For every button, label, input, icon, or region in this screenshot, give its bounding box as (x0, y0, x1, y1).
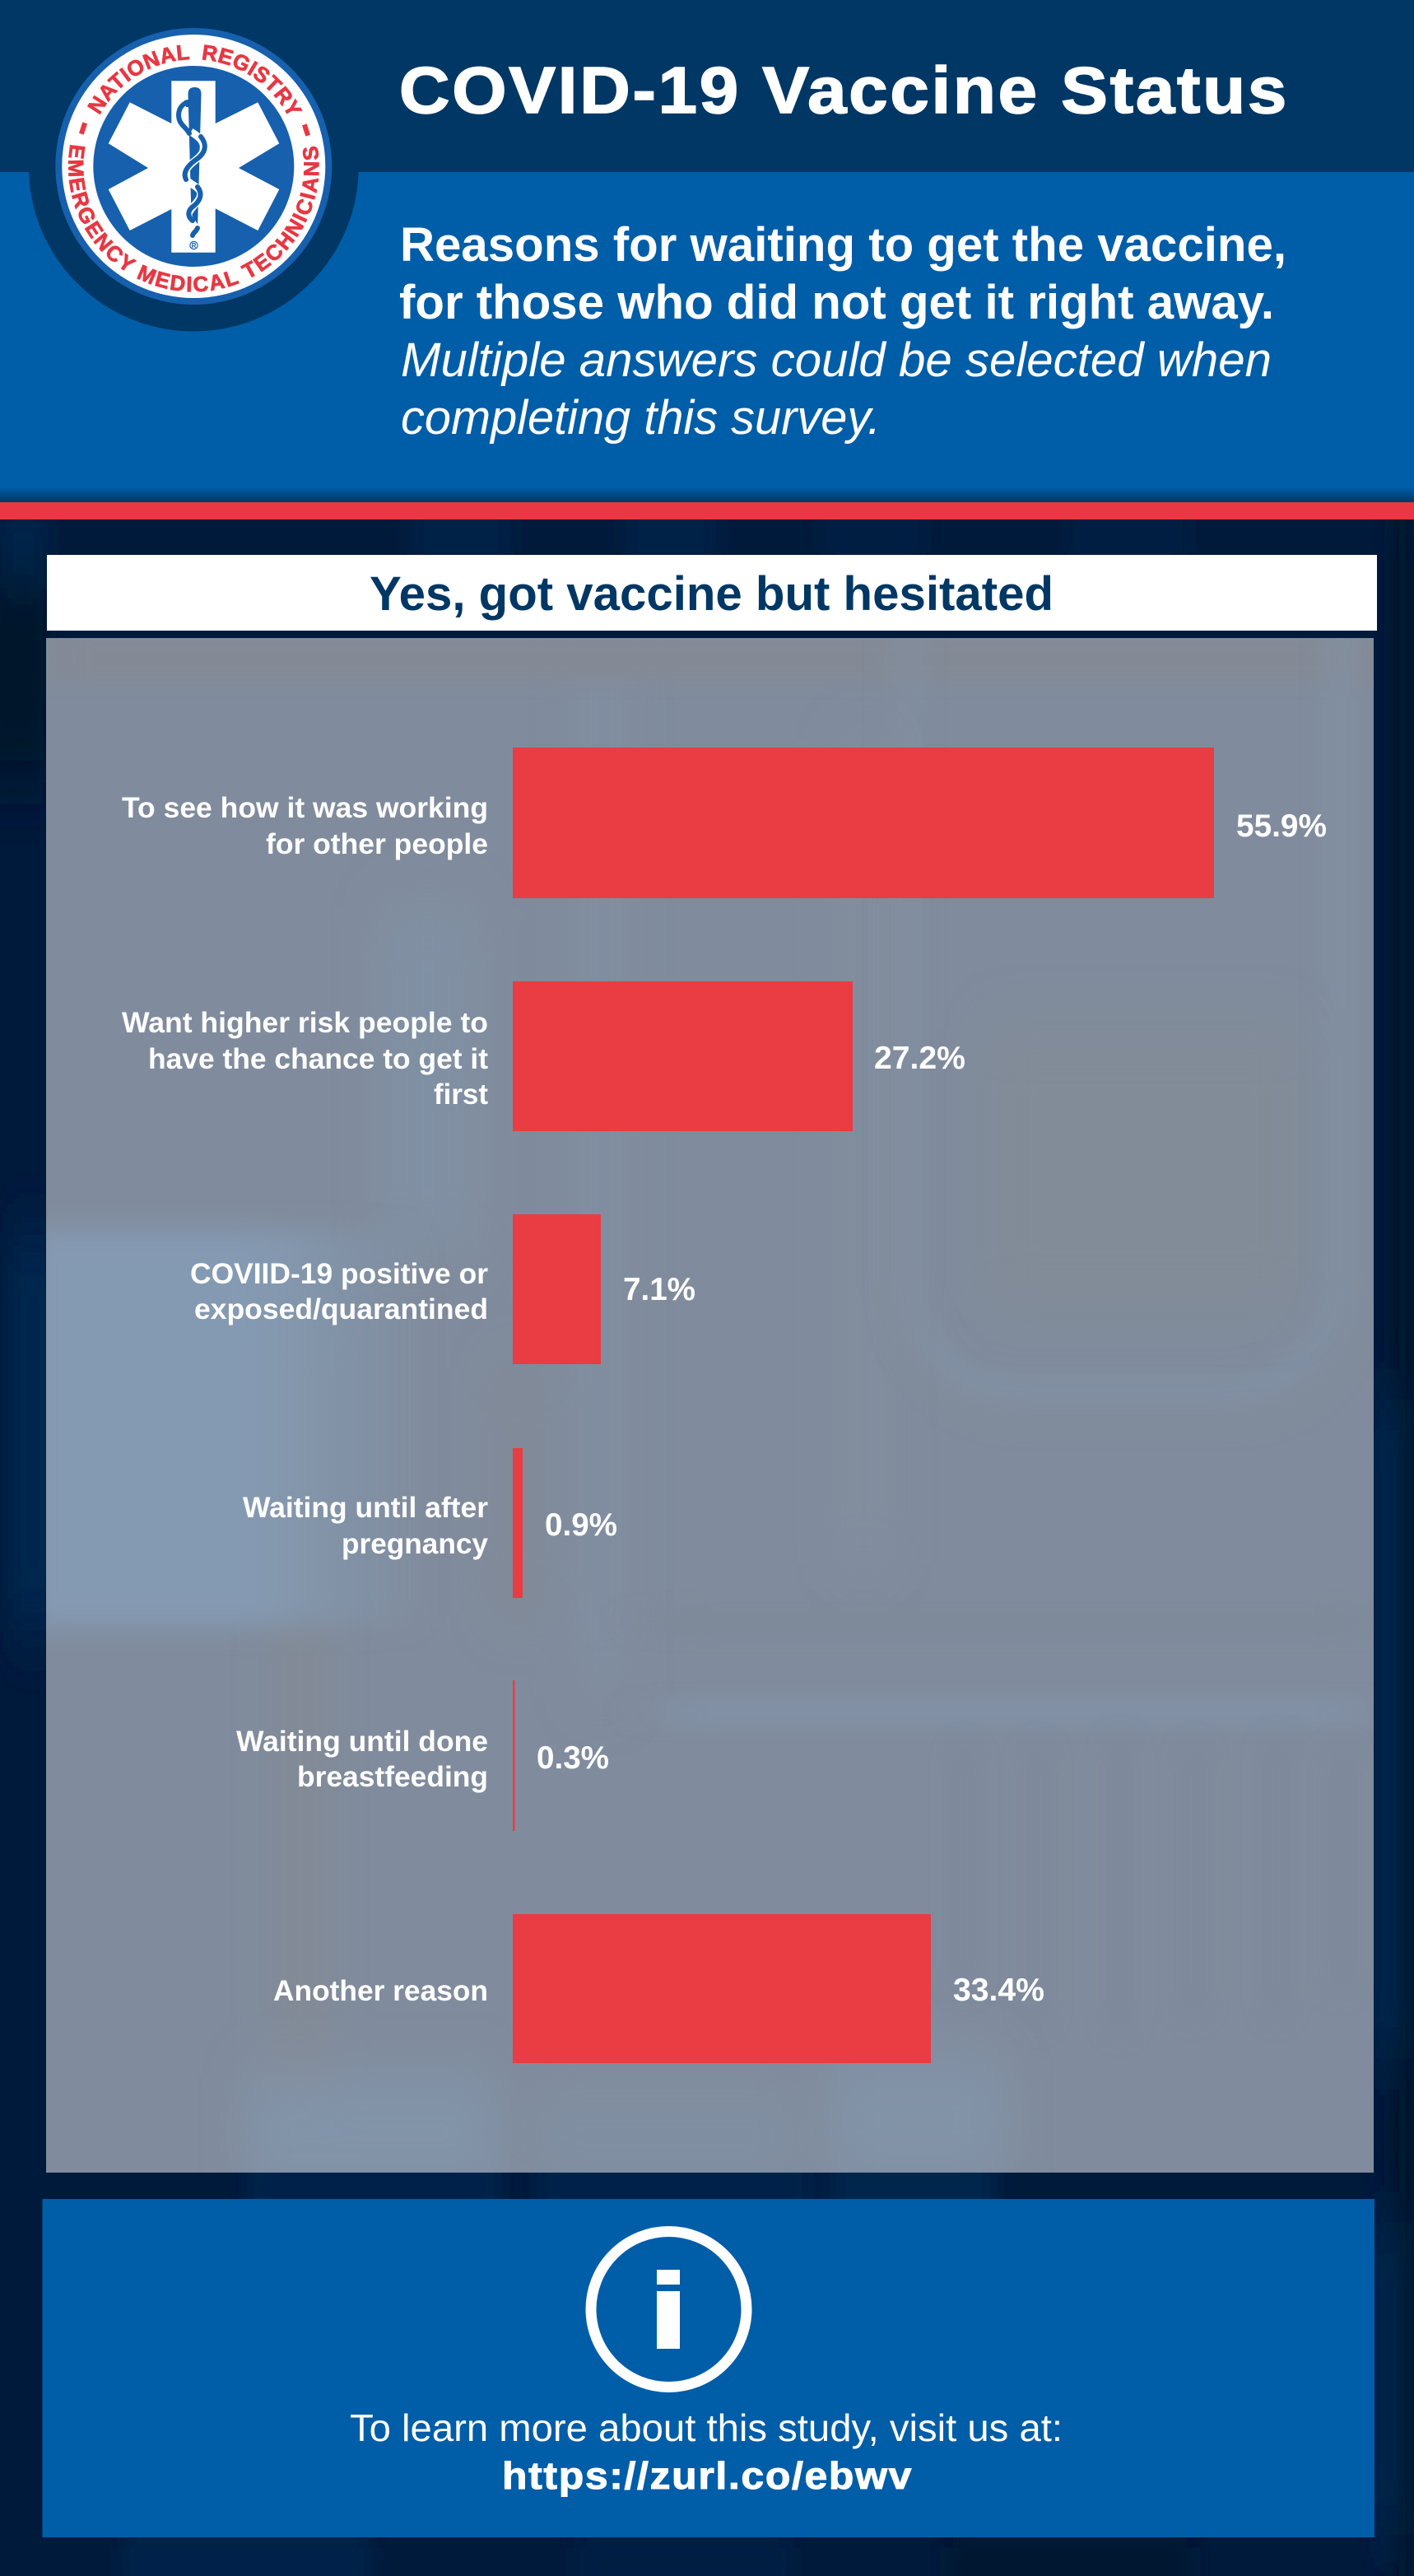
icon: star of life (109, 81, 279, 253)
bar chart (122, 748, 1327, 2063)
header: dark title band (0, 0, 1414, 172)
blurred window outline (897, 445, 1358, 1416)
bar: waiting until after pregnancy 0.9%: 0.9% (545, 1507, 617, 1543)
bar: want higher risk people 27.2%: 27.2% (874, 1041, 965, 1076)
bar: covid positive 7.1% (190, 1214, 695, 1364)
bar: waiting until after pregnancy 0.9%: pregnancy (342, 1527, 488, 1560)
bar: another reason 33.4%: 33.4% (953, 1973, 1044, 2008)
title: COVID-19 Vaccine Status (399, 54, 1289, 127)
panel heading: Yes, got vaccine but hesitated: Yes, got vaccine but hesitated (370, 567, 1054, 621)
bar: want higher risk people 27.2%: have the chance to get it (148, 1042, 488, 1075)
bar: want higher risk people 27.2%: Want higher risk people to (122, 1006, 488, 1039)
chart panel background (46, 638, 1374, 2173)
footer text: To learn more about this study, visit us at: (350, 2406, 1063, 2449)
bar: another reason 33.4% (273, 1914, 1044, 2063)
subtitle block (399, 218, 1286, 445)
bar: covid positive 7.1%: COVIID-19 positive or (190, 1257, 488, 1290)
red divider (0, 502, 1414, 519)
bar: want higher risk people 27.2%: first (434, 1078, 488, 1111)
icon: rod and serpent: R (192, 242, 197, 249)
footer panel (43, 2199, 1374, 2537)
subtitle block: completing this survey. (401, 391, 881, 445)
header: blue subtitle band (0, 172, 1414, 502)
bar: to see how it was working 55.9% (122, 748, 1327, 898)
bar: waiting until done breastfeeding 0.3%: 0.3% (537, 1740, 609, 1776)
bar: covid positive 7.1%: exposed/quarantined (194, 1293, 488, 1325)
ring text: bottom: EMERGENCY MEDICAL TECHNICIANS (67, 145, 319, 292)
bar: to see how it was working 55.9%: for other people (266, 827, 488, 860)
bar: to see how it was working 55.9%: To see how it was working (122, 791, 488, 824)
bar: waiting until after pregnancy 0.9% (243, 1448, 617, 1598)
bar: waiting until after pregnancy 0.9%: Waiting until after (243, 1491, 488, 1524)
logo: National Registry of EMTs (55, 28, 333, 305)
footer link: https://zurl.co/ebwv (502, 2454, 913, 2497)
subtitle block: for those who did not get it right away. (399, 276, 1274, 329)
ring dashes (79, 122, 310, 137)
bar: waiting until done breastfeeding 0.3% (236, 1680, 609, 1831)
bar: to see how it was working 55.9%: 55.9% (1236, 808, 1327, 844)
ring text: top: NATIONAL REGISTRY (87, 44, 303, 115)
bar: want higher risk people 27.2% (122, 981, 965, 1131)
faint blurred lettering (955, 1737, 1351, 2033)
bar: covid positive 7.1%: 7.1% (623, 1272, 695, 1307)
icon: information (591, 2231, 747, 2387)
subtitle block: Multiple answers could be selected when (401, 333, 1272, 387)
subtitle block: Reasons for waiting to get the vaccine, (400, 218, 1286, 272)
bar: waiting until done breastfeeding 0.3%: breastfeeding (297, 1760, 488, 1793)
logo backing semicircle (29, 2, 359, 331)
bar: waiting until done breastfeeding 0.3%: Waiting until done (236, 1725, 488, 1758)
bar: another reason 33.4%: Another reason (273, 1974, 488, 2007)
panel heading: Yes, got vaccine but hesitated (47, 555, 1377, 631)
icon: rod and serpent (179, 87, 205, 249)
